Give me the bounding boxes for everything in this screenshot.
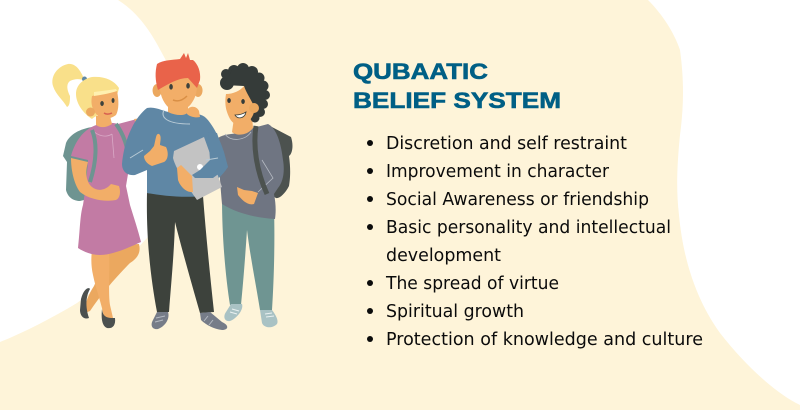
girl arm and hand (71, 158, 120, 201)
girl back leg (85, 244, 140, 313)
curly boy backpack strap (255, 126, 267, 194)
curly boy backpack (262, 126, 292, 198)
curly boy eyes and mouth (227, 98, 245, 104)
heading line 2: BELIEF SYSTEM (353, 88, 561, 113)
list item 7: Protection of knowledge and culture (386, 329, 703, 350)
curly boy ear (249, 103, 259, 113)
girl backpack (63, 127, 100, 201)
red-haired boy sweater (122, 108, 228, 197)
girl eyes and mouth (100, 98, 115, 106)
tablet logo (197, 164, 203, 170)
red-haired boy hand on shoulder (187, 107, 200, 117)
red-haired boy neck (168, 104, 188, 115)
red-haired boy laces (155, 316, 213, 325)
girl dress stitching (92, 130, 114, 158)
curly boy trousers (222, 198, 274, 310)
sweater collar stitching (130, 110, 218, 160)
tablet (173, 137, 222, 200)
list item 2: Improvement in character (386, 161, 610, 182)
list item 1: Discretion and self restraint (386, 133, 627, 154)
girl ear (86, 108, 95, 116)
list item 4 (367, 217, 671, 266)
curly boy neck (232, 116, 253, 135)
curly boy sweater (218, 124, 284, 219)
curly boy hand (237, 187, 258, 204)
student: girl (52, 64, 146, 328)
hand on tablet (177, 165, 193, 192)
curly boy hair (220, 63, 270, 122)
student: boy with curly hair (218, 63, 292, 327)
red-haired boy shoes (152, 312, 227, 330)
list item 4: development (386, 245, 501, 266)
girl ponytail (52, 64, 85, 107)
red-haired boy trousers (147, 193, 214, 313)
red-haired boy ears (153, 84, 203, 97)
curly boy laces (230, 309, 274, 317)
girl far hand (134, 118, 146, 128)
illustration: three students (52, 53, 292, 330)
curly boy face (225, 86, 254, 125)
girl shoes (80, 288, 115, 328)
red-haired boy hair (156, 53, 200, 90)
heading line 1: QUBAATIC (353, 59, 488, 84)
student: red-haired boy (122, 53, 228, 330)
list item 6: Spiritual growth (386, 301, 524, 322)
sweater sleeve over tablet (192, 132, 228, 178)
list item 5: The spread of virtue (385, 273, 559, 294)
girl front leg (91, 250, 113, 318)
girl hair (76, 77, 119, 119)
thumbs-up hand (144, 134, 168, 166)
list item 4: Basic personality and intellectual (386, 217, 671, 238)
girl backpack strap (90, 124, 127, 182)
list item 3: Social Awareness or friendship (386, 189, 649, 210)
curly boy shoes (224, 304, 278, 327)
girl fringe highlight (94, 89, 117, 96)
red-haired boy face (160, 76, 197, 110)
girl dress (71, 119, 141, 255)
heading (353, 59, 561, 113)
curly boy collar stitching (225, 132, 273, 192)
girl neck (96, 116, 112, 127)
girl hair tie (82, 76, 87, 82)
red-haired boy eyes and mouth (169, 83, 190, 90)
girl face (91, 91, 118, 119)
bullet list (367, 133, 703, 350)
